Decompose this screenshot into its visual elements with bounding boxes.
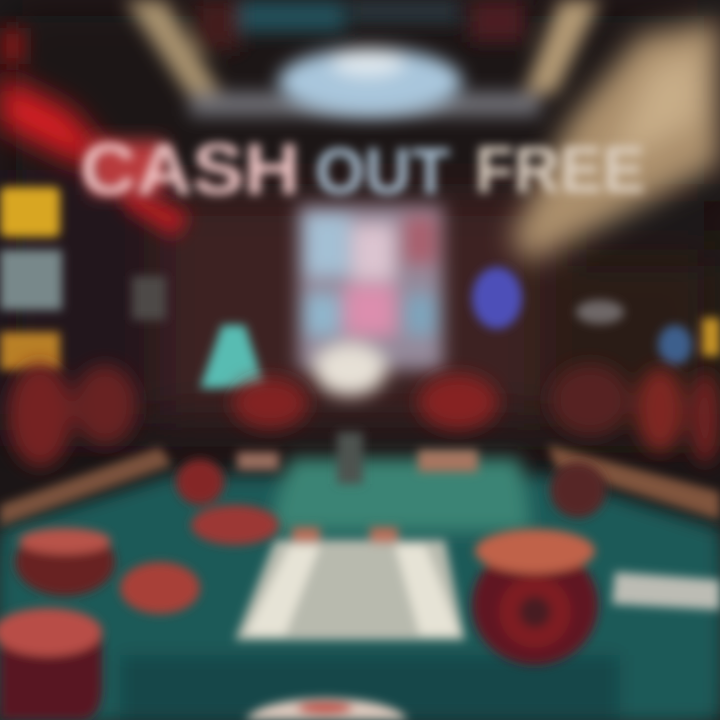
sign lettering: OUT bbox=[315, 134, 450, 208]
sign text bbox=[90, 140, 165, 195]
ceiling bbox=[125, 0, 600, 116]
playing cards bbox=[235, 432, 478, 640]
red neon beam bbox=[0, 75, 120, 170]
table rim bbox=[0, 445, 720, 526]
sign lettering: FREE bbox=[475, 132, 645, 206]
white chip bottom and right card bbox=[245, 572, 720, 720]
glowing dome bbox=[278, 48, 462, 116]
central pastel column bbox=[298, 205, 443, 396]
poker table felt bbox=[0, 458, 720, 720]
large chip bbox=[472, 529, 598, 665]
sign lettering bbox=[80, 130, 645, 210]
red neon beam lower section bbox=[0, 28, 190, 238]
sign lettering: CASH bbox=[80, 130, 300, 210]
right wall cream panel bbox=[510, 20, 720, 262]
red chairs bbox=[8, 363, 720, 467]
teal flask and blue glow bbox=[200, 267, 720, 388]
poker chips bbox=[0, 459, 606, 720]
left wall signs bbox=[0, 187, 166, 370]
